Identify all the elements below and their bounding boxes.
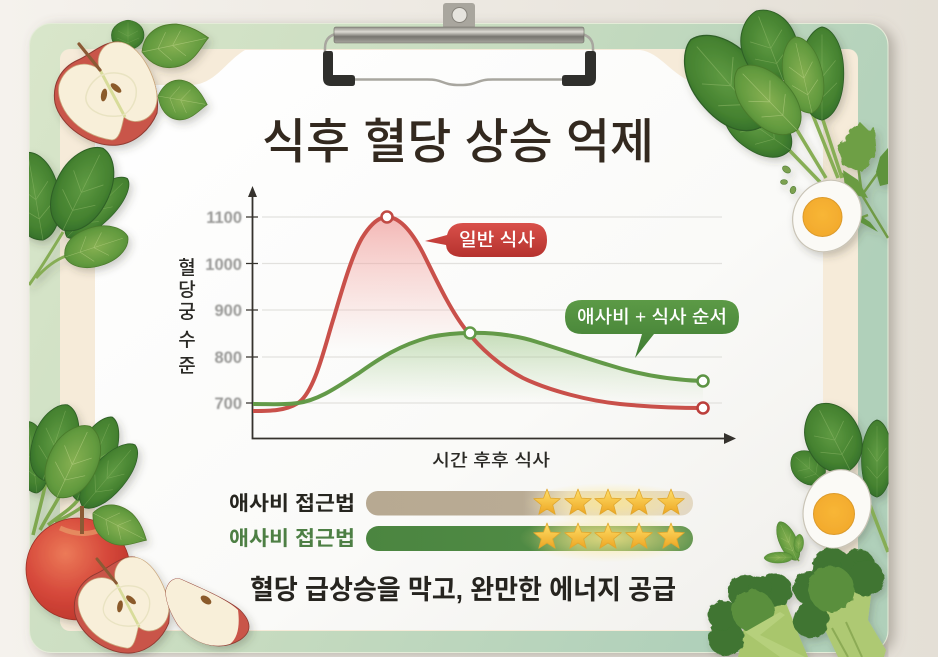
rating label 2: 애사비 접근법 <box>229 527 355 550</box>
illustration: top-left apple and leaves <box>54 17 213 145</box>
rating label 1: 애사비 접근법 <box>229 492 355 515</box>
rating row 1 <box>229 483 694 523</box>
rating bar 1 <box>366 491 693 516</box>
spinach leaves <box>682 10 852 166</box>
y axis title: 궁 <box>178 302 196 323</box>
rating row 2 <box>229 514 699 562</box>
line chart <box>178 186 739 470</box>
illustration: top-right spinach, herb and egg <box>682 10 888 260</box>
callout: regular meal: 일반 식사 <box>459 230 535 250</box>
y axis title: 수 <box>178 330 196 351</box>
clip bar <box>334 27 584 43</box>
callout: vinegar and meal order: 애사비 + 식사 순서 <box>577 307 727 327</box>
rating stars 2 <box>519 514 699 562</box>
title: 식후 혈당 상승 억제 <box>262 116 654 169</box>
small herb sprig <box>764 518 805 564</box>
y axis tick labels: 1000 <box>205 256 242 274</box>
cream backing sheet <box>60 49 858 631</box>
broccoli right <box>793 548 886 657</box>
y axis tick labels: 900 <box>214 302 242 320</box>
illustration: bottom-left apples <box>26 497 249 653</box>
red area fill <box>298 217 482 403</box>
rating bar 2 <box>366 526 693 551</box>
y axis tick labels: 700 <box>214 395 242 413</box>
green area fill <box>340 333 703 405</box>
white paper sheet <box>95 50 823 630</box>
clip wire <box>325 33 593 85</box>
spinach leaves <box>790 402 888 556</box>
illustration: bottom-right spinach, egg and broccoli <box>708 393 892 657</box>
callout: regular meal <box>425 223 547 257</box>
seeds <box>780 164 797 195</box>
y axis tick labels: 800 <box>214 349 242 367</box>
boiled egg <box>802 469 876 554</box>
clip mounting tab <box>443 3 475 29</box>
y axis tick labels: 1100 <box>206 209 242 227</box>
y axis title <box>178 257 196 377</box>
callout: vinegar and meal order <box>565 300 739 358</box>
y axis title: 혈 <box>178 257 196 279</box>
clip right handle <box>562 51 596 86</box>
spinach stems <box>788 114 846 184</box>
y axis title: 준 <box>178 356 196 377</box>
apple half <box>74 557 169 653</box>
bottom summary text: 혈당 급상승을 막고, 완만한 에너지 공급 <box>250 575 676 605</box>
illustration: bottom-left spinach <box>29 404 145 540</box>
green curve: vinegar first <box>253 333 703 404</box>
broccoli left <box>708 574 808 657</box>
herb sprig <box>838 122 888 238</box>
y axis tick labels <box>205 209 242 413</box>
apple slice <box>166 579 249 646</box>
x axis title: 시간 후후 식사 <box>432 451 550 470</box>
clip left handle <box>323 51 355 86</box>
red curve: regular meal <box>253 217 703 411</box>
data point markers <box>382 212 708 414</box>
whole apple <box>26 497 155 620</box>
rating stars 1 <box>524 483 694 523</box>
illustration: left spinach <box>29 146 136 290</box>
axes <box>246 186 736 444</box>
y axis title: 당 <box>178 279 196 301</box>
boiled egg <box>791 180 868 260</box>
clipboard clip <box>323 3 596 86</box>
grid lines <box>262 217 722 403</box>
